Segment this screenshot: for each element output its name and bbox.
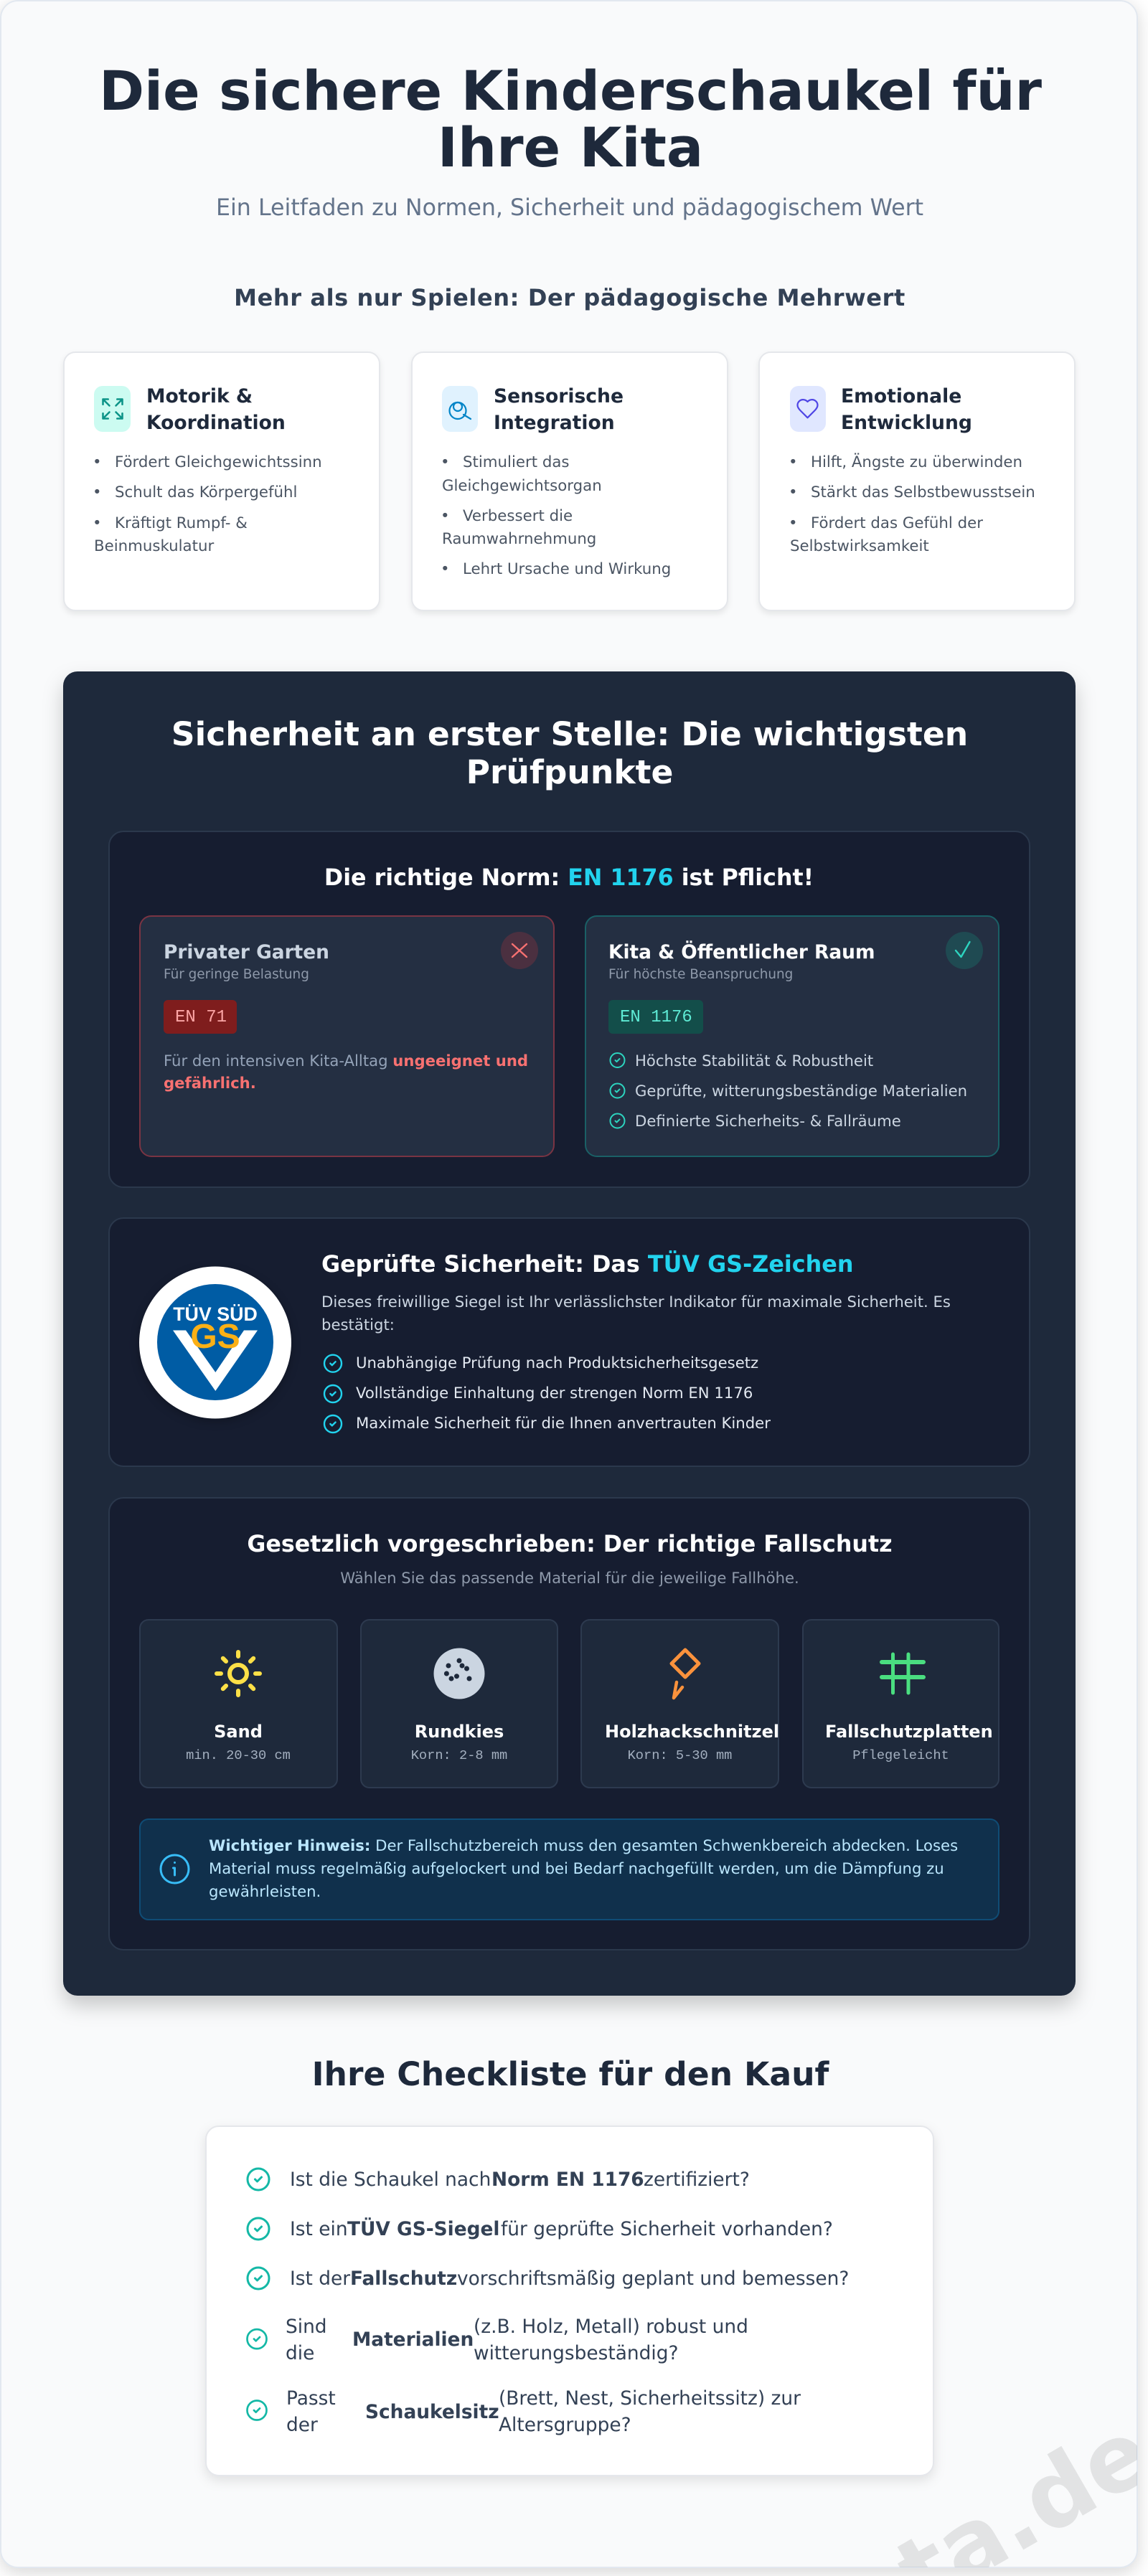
- card list: •: [789, 514, 798, 532]
- tile: Sand: [140, 1620, 337, 1788]
- subtitle: Ein Leitfaden zu Normen, Sicherheit und pädagogischem Wert: [216, 195, 923, 221]
- card heading: Emotionale: [841, 385, 961, 407]
- checklist item 1: [248, 2169, 750, 2191]
- checklist item 3: vorschriftsmäßig geplant und bemessen?: [457, 2268, 849, 2290]
- panel: Checkliste: [206, 2126, 933, 2476]
- card list: Selbstwirksamkeit: [790, 537, 929, 555]
- checklist item 5: (Brett, Nest, Sicherheitssitz) zur: [499, 2387, 801, 2410]
- checklist item 5: Altersgruppe?: [499, 2414, 631, 2436]
- panel: Kita & Öffentlicher Raum: [585, 916, 999, 1156]
- tile: Rundkies: [361, 1620, 557, 1788]
- callout text: gewährleisten.: [209, 1882, 321, 1900]
- Fallschutz subheading: Wählen Sie das passende Material für die jeweilige Fallhöhe.: [340, 1569, 799, 1587]
- panel: Fallschutz: [109, 1498, 1030, 1950]
- icon: sun: [217, 1652, 260, 1695]
- card heading: [841, 385, 972, 434]
- card list: [441, 453, 671, 578]
- tile spec: Korn: 2-8 mm: [411, 1747, 507, 1763]
- norm heading: Die richtige Norm: EN 1176 ist Pflicht!: [324, 865, 814, 891]
- checklist item 2: für geprüfte Sicherheit vorhanden?: [501, 2218, 833, 2240]
- feature list: Geprüfte, witterungsbeständige Materialien: [635, 1082, 967, 1100]
- icon: TÜV SÜD GS logo: TÜV SÜD: [173, 1303, 258, 1325]
- card list: •: [441, 560, 450, 578]
- icon: TÜV SÜD GS logo: [139, 1267, 291, 1419]
- checklist item 4: Sind: [286, 2316, 327, 2338]
- card list: Raumwahrnehmung: [442, 530, 596, 548]
- card list: Verbessert die: [463, 507, 573, 525]
- tile: Fallschutzplatten: [803, 1620, 999, 1788]
- checklist item 4: Materialien: [352, 2329, 474, 2351]
- Fallschutz heading: Gesetzlich vorgeschrieben: Der richtige Fallschutz: [247, 1532, 893, 1557]
- safety heading: Prüfpunkte: [466, 753, 673, 791]
- icon: heart: [790, 386, 826, 432]
- GS heading: Geprüfte Sicherheit: Das TÜV GS-Zeichen: [321, 1250, 853, 1278]
- panel: Emotionale Entwicklung: [759, 352, 1075, 610]
- warning text: Für den intensiven Kita-Alltag ungeeignet und: [164, 1052, 528, 1070]
- icon: TÜV SÜD GS logo: GS: [190, 1318, 240, 1356]
- heading: Checkliste: Ihre Checkliste für den Kauf: [312, 2055, 830, 2093]
- checklist item 4: witterungsbeständig?: [474, 2342, 678, 2364]
- card list: Fördert das Gefühl der: [811, 514, 983, 532]
- card list: [789, 453, 1035, 555]
- checklist item 3: [248, 2268, 849, 2290]
- checklist item 4: (z.B. Holz, Metall) robust und: [474, 2316, 748, 2338]
- card heading: [146, 385, 286, 434]
- heading: pädagogischer Mehrwert: Mehr als nur Spielen: Der pädagogische Mehrwert: [234, 284, 905, 311]
- tile label: Rundkies: [415, 1722, 504, 1742]
- panel: Sicherheit an erster Stelle: [63, 671, 1076, 1996]
- checklist item 4: [247, 2316, 748, 2364]
- title: Ihre Kita: [438, 115, 703, 179]
- checklist item 3: Fallschutz: [350, 2268, 457, 2290]
- card list: •: [93, 514, 102, 532]
- callout text: Wichtiger Hinweis: Der Fallschutzbereich muss den gesamten Schwenkbereich abdecken. Loses: [209, 1836, 958, 1854]
- checklist item 4: die: [286, 2342, 314, 2364]
- icon: expand arrows: [94, 386, 131, 432]
- icon: grid plates: [882, 1654, 923, 1693]
- card list: •: [441, 453, 450, 471]
- card list: Stimuliert das: [463, 453, 570, 471]
- warning text: gefährlich.: [164, 1074, 256, 1092]
- feature list: Definierte Sicherheits- & Fallräume: [635, 1112, 901, 1130]
- panel: Motorik & Koordination: [64, 352, 380, 610]
- icon: X: [501, 932, 538, 969]
- card title: Kita & Öffentlicher Raum: [608, 940, 875, 963]
- card list: Kräftigt Rumpf- &: [115, 514, 248, 532]
- callout: Wichtiger Hinweis: [140, 1819, 999, 1920]
- card list: Hilft, Ängste zu überwinden: [811, 453, 1022, 471]
- card list: •: [93, 483, 102, 501]
- feature list: [610, 1052, 967, 1130]
- checklist item 2: Ist ein: [290, 2218, 348, 2240]
- badge EN 71: [164, 1000, 237, 1034]
- badge EN 1176: EN 1176: [620, 1008, 692, 1027]
- warning text: [164, 1052, 528, 1092]
- card list: •: [441, 507, 450, 525]
- GS check list: Vollständige Einhaltung der strengen Norm EN 1176: [356, 1384, 753, 1402]
- card list: Fördert Gleichgewichtssinn: [115, 453, 322, 471]
- panel: Norm EN 1176: [109, 831, 1030, 1187]
- checklist item 5: [247, 2387, 801, 2436]
- card heading: [494, 385, 624, 434]
- card list: [93, 453, 322, 555]
- panel: Privater Garten: [140, 916, 554, 1156]
- GS paragraph: [321, 1293, 951, 1334]
- icon: check: [946, 932, 983, 969]
- card heading: Entwicklung: [841, 412, 972, 434]
- GS paragraph: Dieses freiwillige Siegel ist Ihr verlässlichster Indikator für maximale Sicherheit. Es: [321, 1293, 951, 1311]
- feature list: Höchste Stabilität & Robustheit: [635, 1052, 873, 1070]
- tile: Holzhackschnitzel: [581, 1620, 779, 1788]
- icon: gravel: [433, 1648, 485, 1699]
- panel: Sensorische Integration: [412, 352, 728, 610]
- tile label: Fallschutzplatten: [825, 1722, 993, 1742]
- badge EN 1176: [608, 1000, 703, 1034]
- card heading: Integration: [494, 412, 615, 434]
- checklist item 3: Ist der: [290, 2268, 350, 2290]
- card list: Lehrt Ursache und Wirkung: [463, 560, 671, 578]
- panel: TÜV GS-Zeichen: [109, 1218, 1030, 1466]
- icon: sensory magnifier: [442, 386, 478, 432]
- tile label: Sand: [214, 1722, 263, 1742]
- icon: info: [161, 1855, 189, 1883]
- title: Die sichere Kinderschaukel für: [99, 59, 1043, 123]
- tile label: Holzhackschnitzel: [605, 1722, 779, 1742]
- card list: •: [789, 483, 798, 501]
- tile spec: Pflegeleicht: [852, 1747, 949, 1763]
- card heading: Koordination: [146, 412, 286, 434]
- card list: Stärkt das Selbstbewusstsein: [811, 483, 1035, 501]
- card list: •: [789, 453, 798, 471]
- badge EN 71: EN 71: [175, 1008, 227, 1027]
- GS paragraph: bestätigt:: [321, 1316, 395, 1334]
- checklist item 1: zertifiziert?: [644, 2169, 750, 2191]
- card heading: Sensorische: [494, 385, 624, 407]
- GS check list: Maximale Sicherheit für die Ihnen anvertrauten Kinder: [356, 1414, 771, 1432]
- icon: wood chip: [672, 1650, 699, 1698]
- title: [99, 59, 1043, 179]
- checklist item 5: Passt: [286, 2387, 336, 2410]
- callout text: Material muss regelmäßig aufgelockert und bei Bedarf nachgefüllt werden, um die Dämpfung zu: [209, 1859, 944, 1877]
- card heading: Motorik &: [146, 385, 253, 407]
- safety heading: Sicherheit an erster Stelle: Die wichtigsten: [171, 715, 968, 753]
- checklist item 1: Ist die Schaukel nach: [290, 2169, 491, 2191]
- GS check list: Unabhängige Prüfung nach Produktsicherheitsgesetz: [356, 1354, 758, 1372]
- card subtitle: Für höchste Beanspruchung: [608, 967, 793, 982]
- checklist item 5: der: [286, 2414, 318, 2436]
- card subtitle: Für geringe Belastung: [164, 967, 309, 982]
- checklist item 2: TÜV GS-Siegel: [347, 2217, 499, 2240]
- safety heading: [171, 715, 968, 791]
- card title: Privater Garten: [164, 941, 329, 963]
- callout text: [209, 1836, 958, 1900]
- card list: •: [93, 453, 102, 471]
- tile spec: min. 20-30 cm: [186, 1747, 291, 1763]
- card list: Gleichgewichtsorgan: [442, 477, 602, 495]
- tile spec: Korn: 5-30 mm: [628, 1747, 732, 1763]
- GS check list: [324, 1354, 771, 1433]
- checklist item 5: Schaukelsitz: [365, 2401, 499, 2423]
- checklist item 2: [248, 2217, 833, 2240]
- card list: Schult das Körpergefühl: [115, 483, 297, 501]
- checklist item 1: Norm EN 1176: [491, 2169, 644, 2191]
- card list: Beinmuskulatur: [94, 537, 214, 555]
